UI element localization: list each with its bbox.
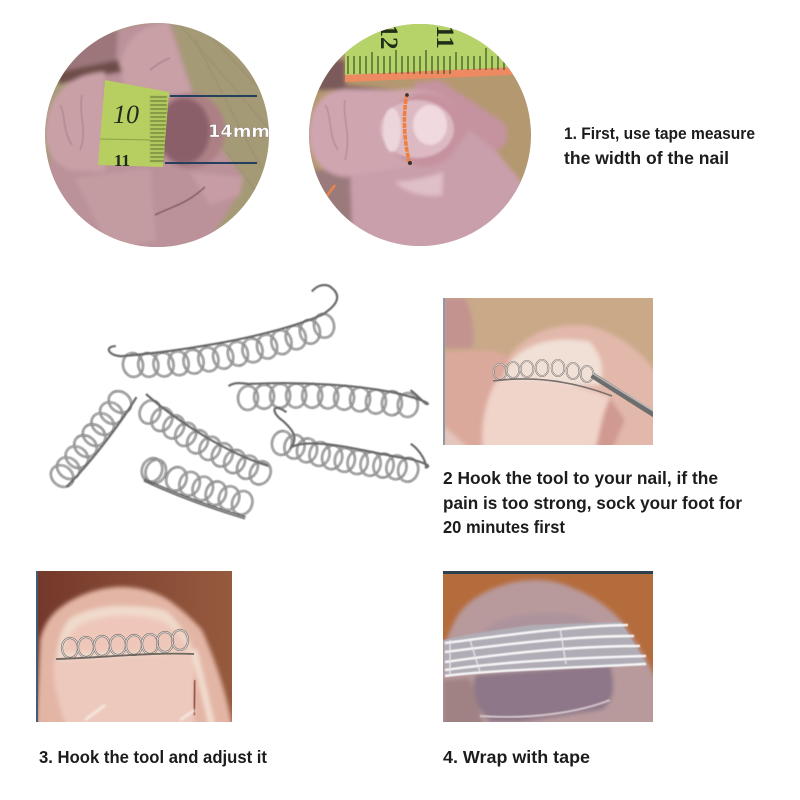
tape on finger [98, 80, 169, 170]
tape on finger: 11 [114, 151, 130, 170]
photo: hooking the tool [443, 298, 660, 450]
ruler: 12 [375, 24, 402, 50]
text: step 2 [443, 468, 742, 537]
ruler [345, 24, 514, 82]
text: step 1 [564, 125, 755, 168]
chain on nail [493, 360, 612, 396]
orange string [404, 93, 410, 165]
chain E [47, 384, 139, 492]
ruler: 11 [431, 25, 458, 49]
chain D [132, 394, 277, 490]
product photo: metal chains [47, 283, 433, 521]
text: step 2: 20 minutes first [443, 517, 565, 537]
chain B [227, 380, 429, 418]
tape wrap [443, 622, 647, 676]
photo: nail wrapped with tape [440, 571, 656, 730]
photo: tape measure around finger [45, 20, 270, 255]
text: step 1: the width of the nail [564, 148, 729, 168]
photo: string around thumb with ruler [305, 20, 535, 250]
chain F [137, 455, 256, 521]
text: step 2: 2 Hook the tool to your nail, if the [443, 468, 718, 488]
chain A [105, 283, 347, 391]
measuring lines [165, 96, 257, 163]
label: 14mm: 14mm [208, 122, 270, 142]
text: step 1: 1. First, use tape measure [564, 125, 755, 143]
photo: hook adjusted on nail [36, 571, 233, 730]
chain C [265, 407, 433, 489]
text: step 3: 3. Hook the tool and adjust it [39, 747, 267, 767]
text: step 2: pain is too strong, sock your foot for [443, 493, 742, 513]
tool [592, 375, 655, 415]
chain on nail [56, 630, 194, 659]
tape on finger: 10 [113, 100, 139, 129]
text: step 4: 4. Wrap with tape [443, 747, 590, 767]
